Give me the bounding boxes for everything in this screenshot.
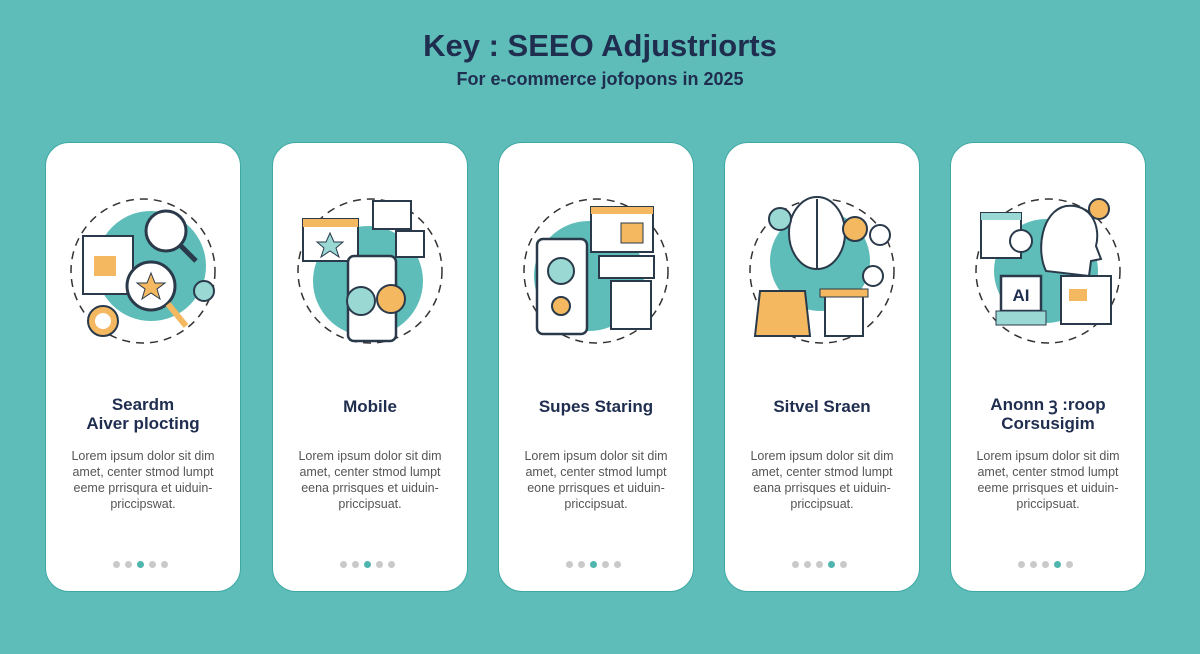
- heading: [86, 395, 200, 433]
- heading: Sitvel Sraen: [773, 397, 871, 416]
- heading: Corsusigim: [1001, 414, 1095, 433]
- body text: Lorem ipsum dolor sit dim amet, center stmod lumpt eena prrisques et uiduin-priccipsuat.: [298, 449, 442, 511]
- pagination dots: [113, 561, 168, 568]
- icon: devices: [523, 198, 669, 344]
- heading: Supes Staring: [539, 397, 653, 416]
- icon: brain and shopping: [749, 196, 895, 344]
- heading: Mobile: [343, 397, 397, 416]
- title: Key : SEEO Adjustriorts: [423, 28, 777, 63]
- body text: Lorem ipsum dolor sit dim amet, center stmod lumpt eone prrisques et uiduin-priccipsuat.: [524, 449, 668, 511]
- pagination dots: [792, 561, 847, 568]
- panel: card 5: [950, 142, 1146, 592]
- icon: search analysis: [70, 198, 216, 344]
- icon: AI head: AI: [1012, 286, 1030, 305]
- pagination dots: [566, 561, 621, 568]
- body text: Lorem ipsum dolor sit dim amet, center stmod lumpt eeme prrisques et uiduin-priccipsuat.: [976, 449, 1120, 511]
- pagination dots: [340, 561, 395, 568]
- heading: [990, 395, 1106, 433]
- panel: card 1: [45, 142, 241, 592]
- icon: mobile: [297, 198, 443, 344]
- icon: AI head: [975, 198, 1121, 344]
- subtitle: For e-commerce jofopons in 2025: [456, 69, 744, 89]
- heading: Seardm: [112, 395, 174, 414]
- body text: Lorem ipsum dolor sit dim amet, center stmod lumpt eana prrisques et uiduin-priccipsuat.: [750, 449, 894, 511]
- body text: Lorem ipsum dolor sit dim amet, center stmod lumpt eeme prrisqura et uiduin-priccipswat.: [71, 449, 215, 511]
- panel: card 3: [498, 142, 694, 592]
- heading: Anonn ꝫ :roop: [990, 395, 1106, 414]
- panel: card 2: [272, 142, 468, 592]
- pagination dots: [1018, 561, 1073, 568]
- heading: Aiver plocting: [86, 414, 200, 433]
- panel: card 4: [724, 142, 920, 592]
